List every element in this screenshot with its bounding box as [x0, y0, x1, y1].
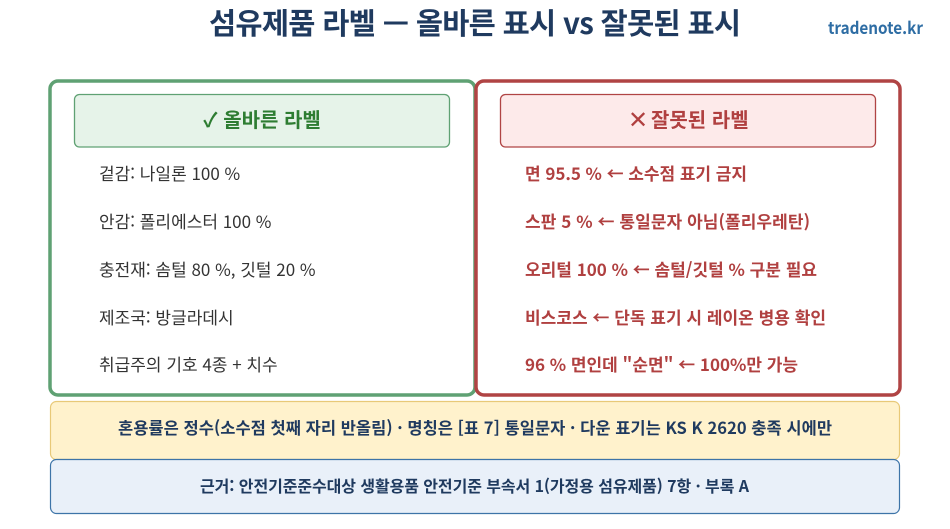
incorrect label list: 오리털 100 % ← 솜털/깃털 % 구분 필요	[525, 256, 817, 281]
correct label list	[99, 160, 316, 376]
correct label list: 겉감: 나일론 100 %	[99, 160, 240, 185]
panel heading: incorrect label	[500, 94, 876, 147]
incorrect label list: 스판 5 % ← 통일문자 아님(폴리우레탄)	[525, 208, 810, 233]
incorrect label list: 면 95.5 % ← 소수점 표기 금지	[525, 160, 747, 185]
callout: legal basis	[50, 460, 900, 514]
correct label list: 제조국: 방글라데시	[99, 304, 234, 329]
panel heading: incorrect label: 잘못된 라벨	[651, 104, 749, 133]
incorrect label list: 96 % 면인데 "순면" ← 100%만 가능	[525, 351, 798, 376]
correct label list: 충전재: 솜털 80 %, 깃털 20 %	[99, 256, 316, 281]
panel heading: correct label	[74, 94, 450, 147]
brand label: tradenote.kr	[828, 15, 924, 39]
panel heading: incorrect label: ✕	[628, 106, 648, 134]
panel heading: correct label: ✓ 올바른 라벨	[203, 104, 321, 133]
correct label list: 안감: 폴리에스터 100 %	[99, 208, 271, 233]
incorrect label list	[525, 160, 826, 376]
callout: rounding and naming rule	[50, 402, 900, 460]
title: 섬유제품 라벨 — 올바른 표시 vs 잘못된 표시	[209, 1, 741, 43]
panel: incorrect label	[476, 81, 900, 395]
callout: rounding and naming rule: 혼용률은 정수(소수점 첫째 자리 반올림) · 명칭은 [표 7] 통일문자 · 다운 표기는 KS K 2620 충족 시에만	[118, 415, 832, 439]
correct label list: 취급주의 기호 4종 + 치수	[99, 351, 278, 376]
panel: correct label	[50, 81, 475, 395]
callout: legal basis: 근거: 안전기준준수대상 생활용품 안전기준 부속서 1(가정용 섬유제품) 7항 · 부록 A	[200, 473, 750, 497]
incorrect label list: 비스코스 ← 단독 표기 시 레이온 병용 확인	[525, 304, 826, 329]
